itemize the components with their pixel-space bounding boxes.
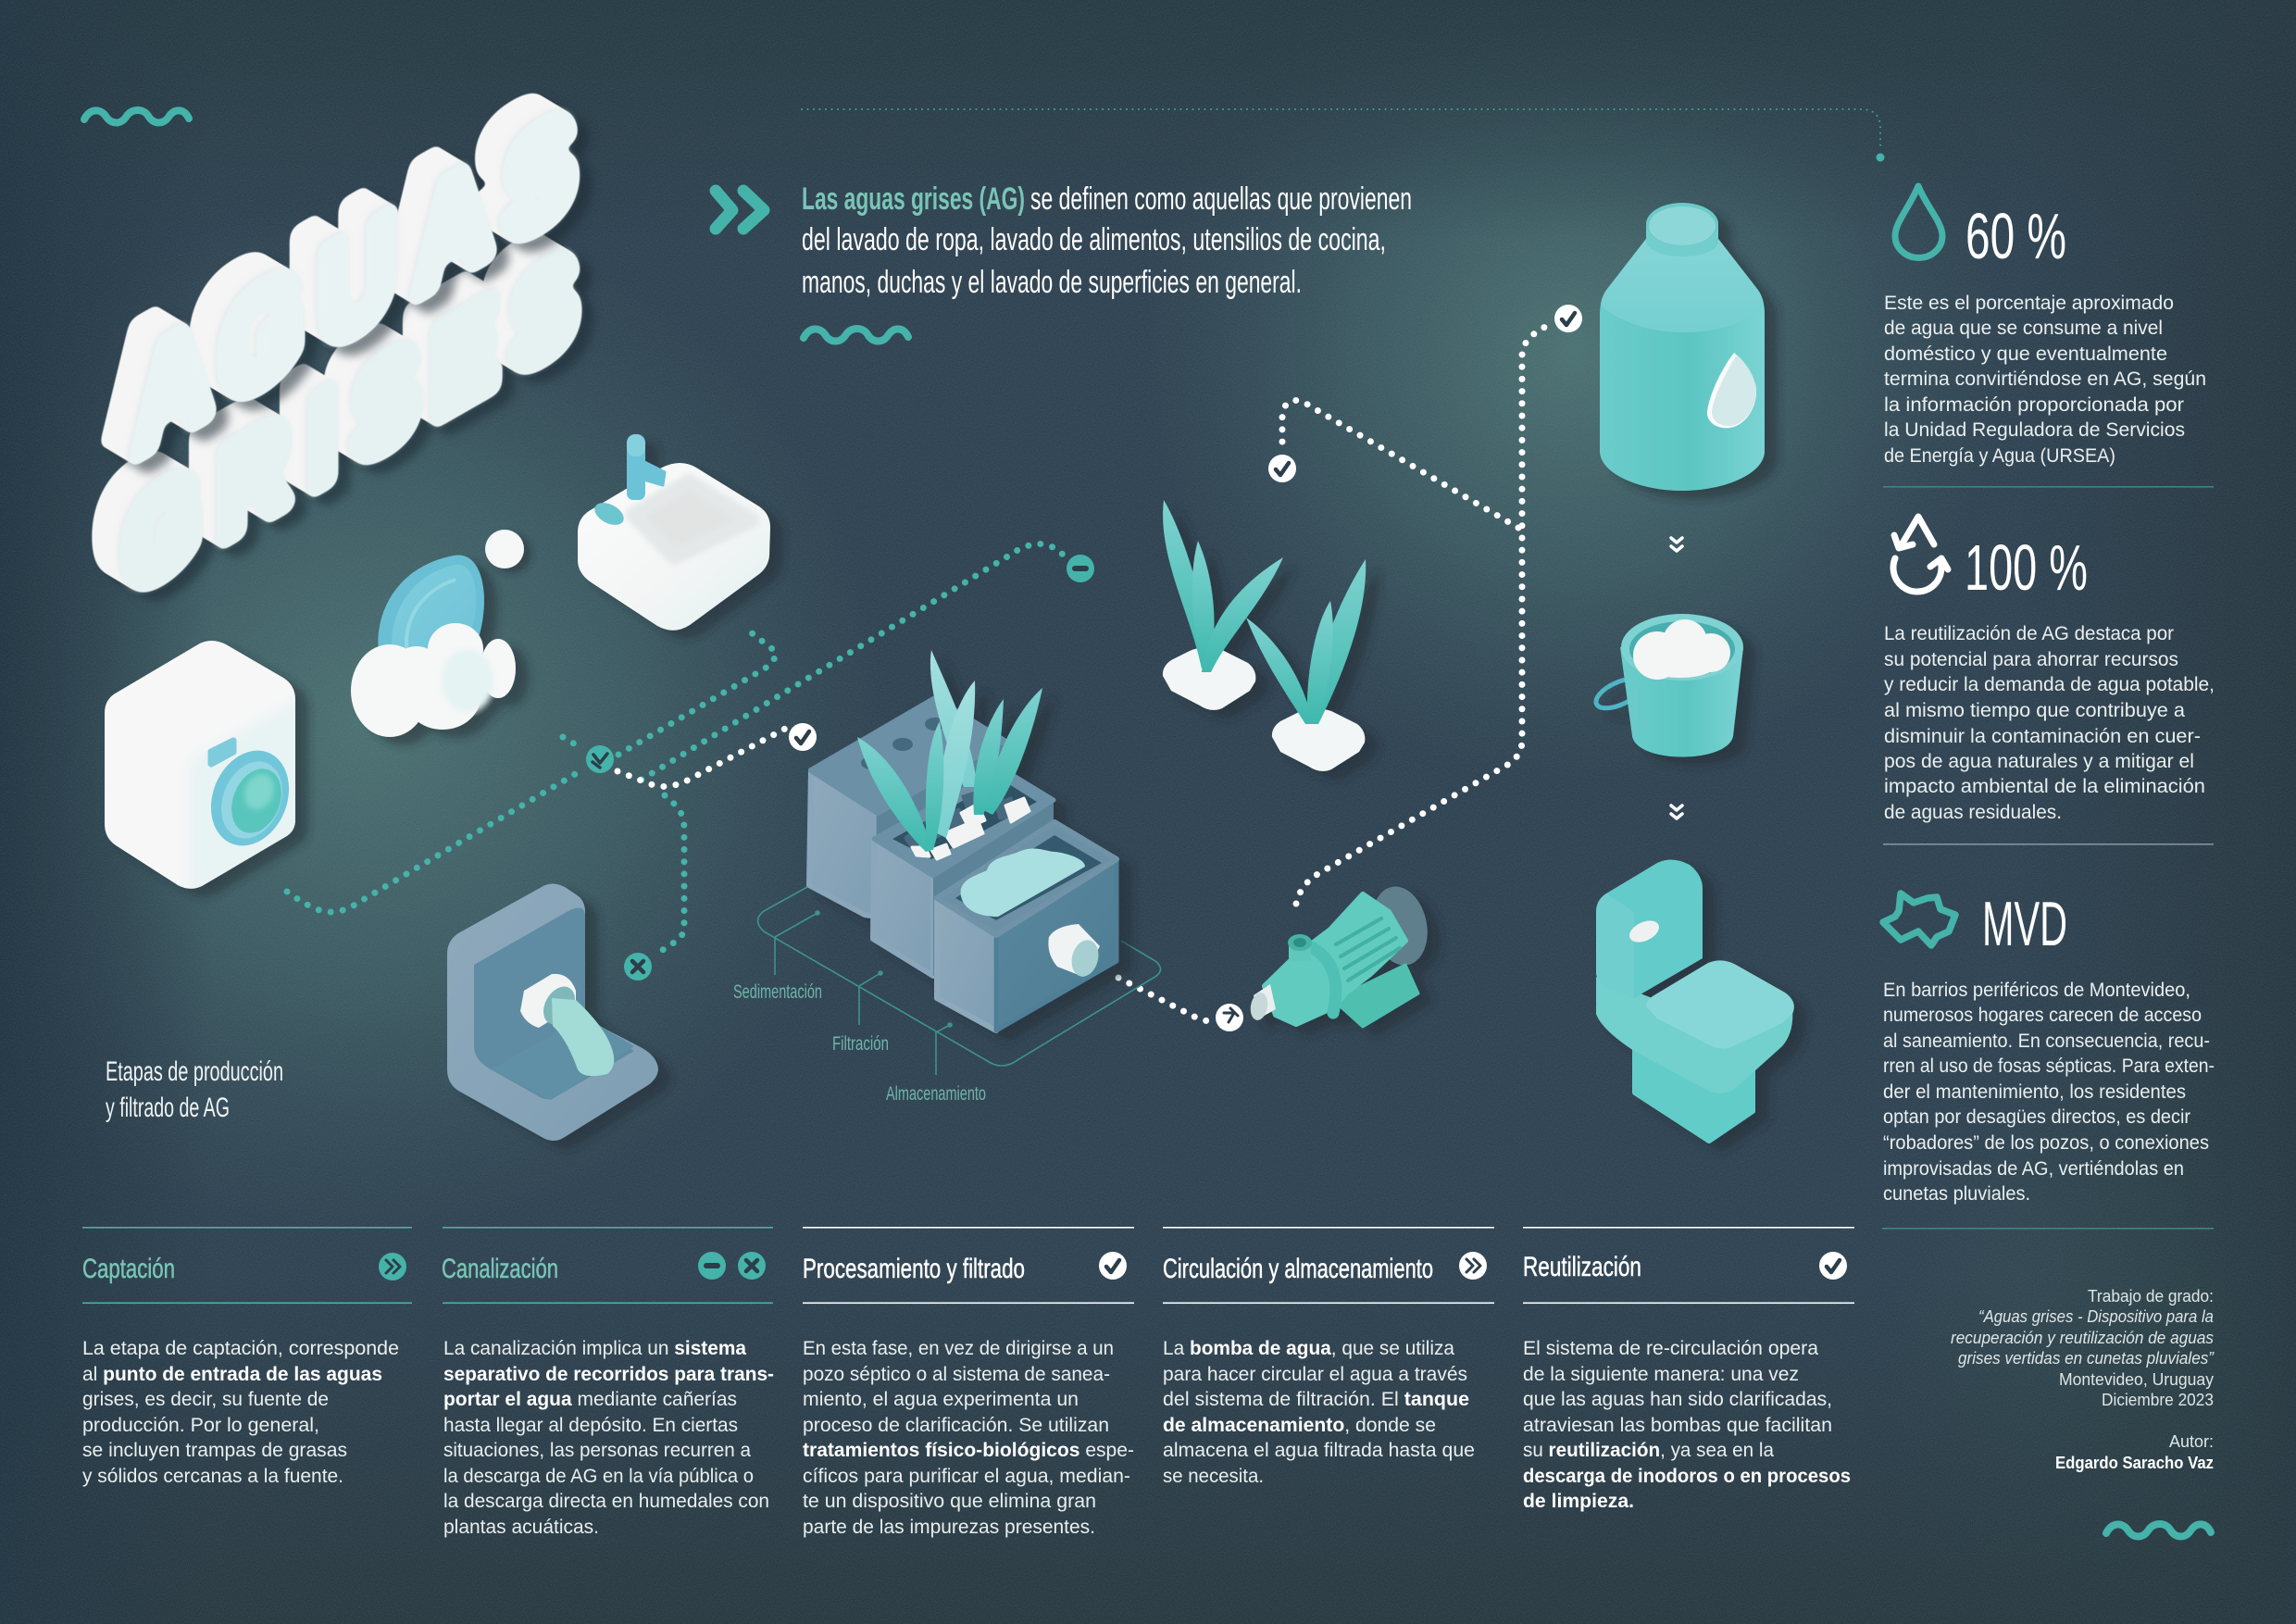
MVD label: MVD xyxy=(1982,889,2067,959)
tank storage xyxy=(937,822,1117,1031)
chevron down top xyxy=(1671,538,1682,551)
credits: Edgardo Saracho Vaz xyxy=(2055,1454,2214,1472)
pot right leaves xyxy=(1246,559,1366,724)
text canalizacion xyxy=(443,1338,774,1538)
text: 60: de Energía y Agua (URSEA) xyxy=(1884,445,2115,467)
column: captacion xyxy=(82,1227,412,1487)
text reutilizacion: de la siguiente manera: una vez xyxy=(1523,1364,1799,1385)
label almacenamiento: Almacenamiento xyxy=(886,1083,986,1105)
text captacion: grises, es decir, su fuente de xyxy=(82,1389,329,1410)
white pipelines xyxy=(618,321,1554,1020)
text procesamiento: te un dispositivo que elimina gran xyxy=(803,1491,1096,1512)
pot right base xyxy=(1272,708,1365,771)
text captacion: y sólidos cercanas a la fuente. xyxy=(82,1466,343,1487)
text: 100: impacto ambiental de la eliminación xyxy=(1884,776,2205,797)
intro text: Las aguas grises (AG) xyxy=(802,181,1025,217)
text: MVD: numerosos hogares carecen de acceso xyxy=(1883,1005,2202,1026)
washer door xyxy=(197,739,303,857)
chevron down bottom xyxy=(1671,806,1682,818)
text: MVD: optan por desagües directos, es decir xyxy=(1883,1106,2190,1128)
column: reutilizacion xyxy=(1523,1227,1854,1512)
text canalizacion: portar el agua mediante cañerías xyxy=(443,1389,737,1410)
text procesamiento: cíficos para purificar el agua, median- xyxy=(803,1466,1130,1487)
tank filtration xyxy=(873,768,1054,976)
caption: etapas: y filtrado de AG xyxy=(106,1093,230,1123)
title word: aguas: AGUAS xyxy=(134,79,576,485)
icon: check xyxy=(1819,1252,1847,1280)
text: 60 xyxy=(1884,293,2206,467)
text: 100: al mismo tiempo que contribuye a xyxy=(1884,700,2185,721)
icon: water drop xyxy=(1895,186,1942,257)
icon: forward xyxy=(379,1253,406,1280)
heading canalizacion: Canalización xyxy=(442,1254,558,1284)
soap xyxy=(591,498,628,530)
text: MVD: al saneamiento. En consecuencia, recu- xyxy=(1883,1031,2210,1052)
text reutilizacion xyxy=(1523,1338,1851,1512)
water pump xyxy=(1249,881,1434,1027)
toilet bowl xyxy=(1596,963,1792,1093)
base foot xyxy=(1333,965,1418,1027)
heading procesamiento: Procesamiento y filtrado xyxy=(803,1254,1025,1284)
text: MVD: “robadores” de los pozos, o conexiones xyxy=(1883,1132,2209,1154)
credits: Montevideo, Uruguay xyxy=(2059,1370,2214,1389)
plant pot right xyxy=(1246,559,1366,771)
text circulacion: se necesita. xyxy=(1163,1466,1264,1487)
text canalizacion: plantas acuáticas. xyxy=(443,1517,599,1538)
node: check tanks xyxy=(789,723,817,751)
water stream xyxy=(552,998,614,1076)
column: canalizacion xyxy=(442,1227,774,1538)
motor end xyxy=(1366,881,1434,970)
credits: Diciembre 2023 xyxy=(2102,1391,2214,1409)
ball xyxy=(485,530,524,568)
column: procesamiento xyxy=(803,1227,1134,1538)
teal pipelines xyxy=(287,544,1064,955)
text procesamiento: En esta fase, en vez de dirigirse a un xyxy=(803,1338,1114,1359)
text: 60: de agua que se consume a nivel xyxy=(1884,318,2163,339)
text captacion: al punto de entrada de las aguas xyxy=(82,1364,382,1385)
text: MVD: cunetas pluviales. xyxy=(1883,1183,2030,1205)
node: minus xyxy=(1067,555,1094,582)
number 100: 100 % xyxy=(1965,531,2088,604)
housing ring xyxy=(1309,946,1336,1013)
text procesamiento: tratamientos físico-biológicos espe- xyxy=(803,1440,1134,1461)
bottle xyxy=(1592,203,1773,491)
text: MVD: improvisadas de AG, vertiéndolas en xyxy=(1883,1158,2184,1180)
intro text: del lavado de ropa, lavado de alimentos, utensilios de cocina, xyxy=(802,222,1386,257)
node: check plants xyxy=(1268,455,1296,482)
label sedimentacion: Sedimentación xyxy=(733,981,822,1003)
faucet xyxy=(627,434,665,500)
credits: Autor: xyxy=(2169,1432,2214,1451)
chevrons intro xyxy=(716,191,764,229)
sink xyxy=(578,434,770,631)
text reutilizacion: atraviesan las bombas que facilitan xyxy=(1523,1415,1832,1436)
text: 100: de aguas residuales. xyxy=(1884,802,2062,823)
stones xyxy=(905,781,1029,859)
text reutilizacion: que las aguas han sido clarificadas, xyxy=(1523,1389,1832,1410)
bucket foam xyxy=(1633,619,1730,680)
text circulacion xyxy=(1163,1338,1475,1487)
text: MVD xyxy=(1883,980,2215,1205)
text: 100 xyxy=(1884,623,2215,823)
text captacion: La etapa de captación, corresponde xyxy=(82,1338,399,1359)
text canalizacion: la descarga directa en humedales con xyxy=(443,1491,769,1512)
icon: check xyxy=(1099,1252,1127,1280)
text reutilizacion: descarga de inodoros o en procesos xyxy=(1523,1466,1851,1487)
toilet xyxy=(1596,859,1794,1141)
column: circulacion xyxy=(1163,1227,1494,1487)
plate and foam xyxy=(351,555,516,737)
caption: etapas xyxy=(106,1056,283,1123)
tray outline and leaders xyxy=(757,887,1161,1075)
text circulacion: del sistema de filtración. El tanque xyxy=(1163,1389,1469,1410)
text: 100: disminuir la contaminación en cuer- xyxy=(1884,726,2201,747)
credits: “Aguas grises - Dispositivo para la xyxy=(1978,1307,2214,1326)
stat: 60 percent xyxy=(1884,186,2206,467)
text canalizacion: La canalización implica un sistema xyxy=(443,1338,746,1359)
label filtracion: Filtración xyxy=(832,1033,889,1055)
bucket handle xyxy=(1591,673,1647,714)
intro text: se definen como aquellas que provienen xyxy=(1030,181,1412,217)
icon: forward xyxy=(1459,1252,1487,1280)
drain with pipe xyxy=(447,883,658,1141)
stat: 100 percent xyxy=(1884,517,2215,823)
text procesamiento: miento, el agua experimenta un xyxy=(803,1389,1079,1410)
text canalizacion: situaciones, las personas recurren a xyxy=(443,1440,751,1461)
credits: grises vertidas en cunetas pluviales” xyxy=(1958,1349,2215,1368)
icon: recycled drop xyxy=(1893,517,1948,592)
node: check bottle xyxy=(1554,305,1582,332)
node: pump xyxy=(1216,1004,1243,1031)
text captacion: producción. Por lo general, xyxy=(82,1415,319,1436)
text: 60: termina convirtiéndose en AG, según xyxy=(1884,369,2206,390)
intro text: manos, duchas y el lavado de superficies en general. xyxy=(802,265,1302,300)
text canalizacion: la descarga de AG en la vía pública o xyxy=(443,1466,754,1487)
heading circulacion: Circulación y almacenamiento xyxy=(1163,1254,1433,1284)
icon: cross xyxy=(738,1252,766,1280)
heading captacion: Captación xyxy=(82,1254,175,1284)
washer panel xyxy=(211,741,233,764)
text circulacion: La bomba de agua, que se utiliza xyxy=(1163,1338,1454,1359)
text: MVD: En barrios periféricos de Montevideo, xyxy=(1883,980,2190,1001)
title word: grises: GRISES xyxy=(124,222,578,623)
text circulacion: de almacenamiento, donde se xyxy=(1163,1415,1436,1436)
bottle cap xyxy=(1646,203,1718,256)
text: 60: doméstico y que eventualmente xyxy=(1884,344,2167,365)
bottle drop xyxy=(1707,353,1756,428)
stat: MVD xyxy=(1883,889,2215,1205)
text: 60: la información proporcionada por xyxy=(1884,394,2184,416)
credits: Trabajo de grado: xyxy=(2088,1287,2214,1305)
plant pot left xyxy=(1163,500,1283,710)
washing machine xyxy=(105,641,306,903)
title: aguas grises xyxy=(124,79,578,623)
text canalizacion: separativo de recorridos para trans- xyxy=(443,1364,774,1385)
motor ribs xyxy=(1336,918,1400,981)
wave top left xyxy=(84,110,189,122)
pipe outlet xyxy=(520,974,581,1031)
sink basin xyxy=(633,481,752,557)
text: 100: La reutilización de AG destaca por xyxy=(1884,623,2174,644)
credits xyxy=(1951,1287,2215,1472)
foam in tank xyxy=(961,848,1085,917)
text reutilizacion: El sistema de re-circulación opera xyxy=(1523,1338,1818,1359)
text procesamiento: pozo séptico o al sistema de sanea- xyxy=(803,1364,1110,1385)
text procesamiento xyxy=(803,1338,1134,1538)
text procesamiento: proceso de clarificación. Se utilizan xyxy=(803,1415,1109,1436)
toilet tank xyxy=(1596,859,1703,998)
text canalizacion: hasta llegar al depósito. En ciertas xyxy=(443,1415,738,1436)
tank sedimentation xyxy=(809,698,1004,917)
foam xyxy=(351,623,516,737)
bottle shoulder xyxy=(1600,239,1765,332)
text captacion: se incluyen trampas de grasas xyxy=(82,1440,347,1461)
wave bottom right xyxy=(2106,1524,2211,1537)
pot left leaves xyxy=(1163,500,1283,672)
icon: Montevideo map xyxy=(1883,893,1955,945)
toilet pedestal xyxy=(1635,1042,1753,1141)
text reutilizacion: de limpieza. xyxy=(1523,1491,1634,1512)
text captacion xyxy=(82,1338,399,1487)
pot left base xyxy=(1163,647,1255,710)
plate xyxy=(378,555,484,671)
toilet lid xyxy=(1646,960,1794,1049)
wave under intro xyxy=(804,329,908,341)
text: 100: pos de agua naturales y a mitigar el xyxy=(1884,751,2194,772)
text: MVD: der el mantenimiento, los residentes xyxy=(1883,1081,2186,1103)
text procesamiento: parte de las impurezas presentes. xyxy=(803,1517,1095,1538)
toilet button xyxy=(1626,917,1663,946)
text: 60: la Unidad Reguladora de Servicios xyxy=(1884,419,2185,441)
bucket xyxy=(1591,614,1743,757)
tank plants xyxy=(857,650,1042,852)
text circulacion: para hacer circular el agua a través xyxy=(1163,1364,1467,1385)
heading reutilizacion: Reutilización xyxy=(1523,1252,1641,1282)
caption: etapas: Etapas de producción xyxy=(106,1056,283,1087)
node: cross xyxy=(624,953,652,981)
node: funnel xyxy=(586,745,614,773)
number 60: 60 % xyxy=(1965,200,2066,272)
filter tanks xyxy=(809,650,1117,1031)
text: 60: Este es el porcentaje aproximado xyxy=(1884,293,2174,314)
pump outlet xyxy=(1249,984,1276,1021)
text reutilizacion: su reutilización, ya sea en la xyxy=(1523,1440,1774,1461)
pump body xyxy=(1265,894,1405,1024)
top pipe xyxy=(1288,934,1312,961)
text: MVD: rren al uso de fosas sépticas. Para exten- xyxy=(1883,1056,2215,1077)
tank outlet xyxy=(1048,924,1103,980)
text: 100: su potencial para ahorrar recursos xyxy=(1884,649,2178,670)
text: 100: y reducir la demanda de agua potable, xyxy=(1884,674,2215,695)
credits: recuperación y reutilización de aguas xyxy=(1951,1329,2214,1347)
icon: minus xyxy=(698,1252,726,1280)
text circulacion: almacena el agua filtrada hasta que xyxy=(1163,1440,1475,1461)
intro text xyxy=(802,181,1412,300)
dotted top connector xyxy=(802,109,1885,161)
